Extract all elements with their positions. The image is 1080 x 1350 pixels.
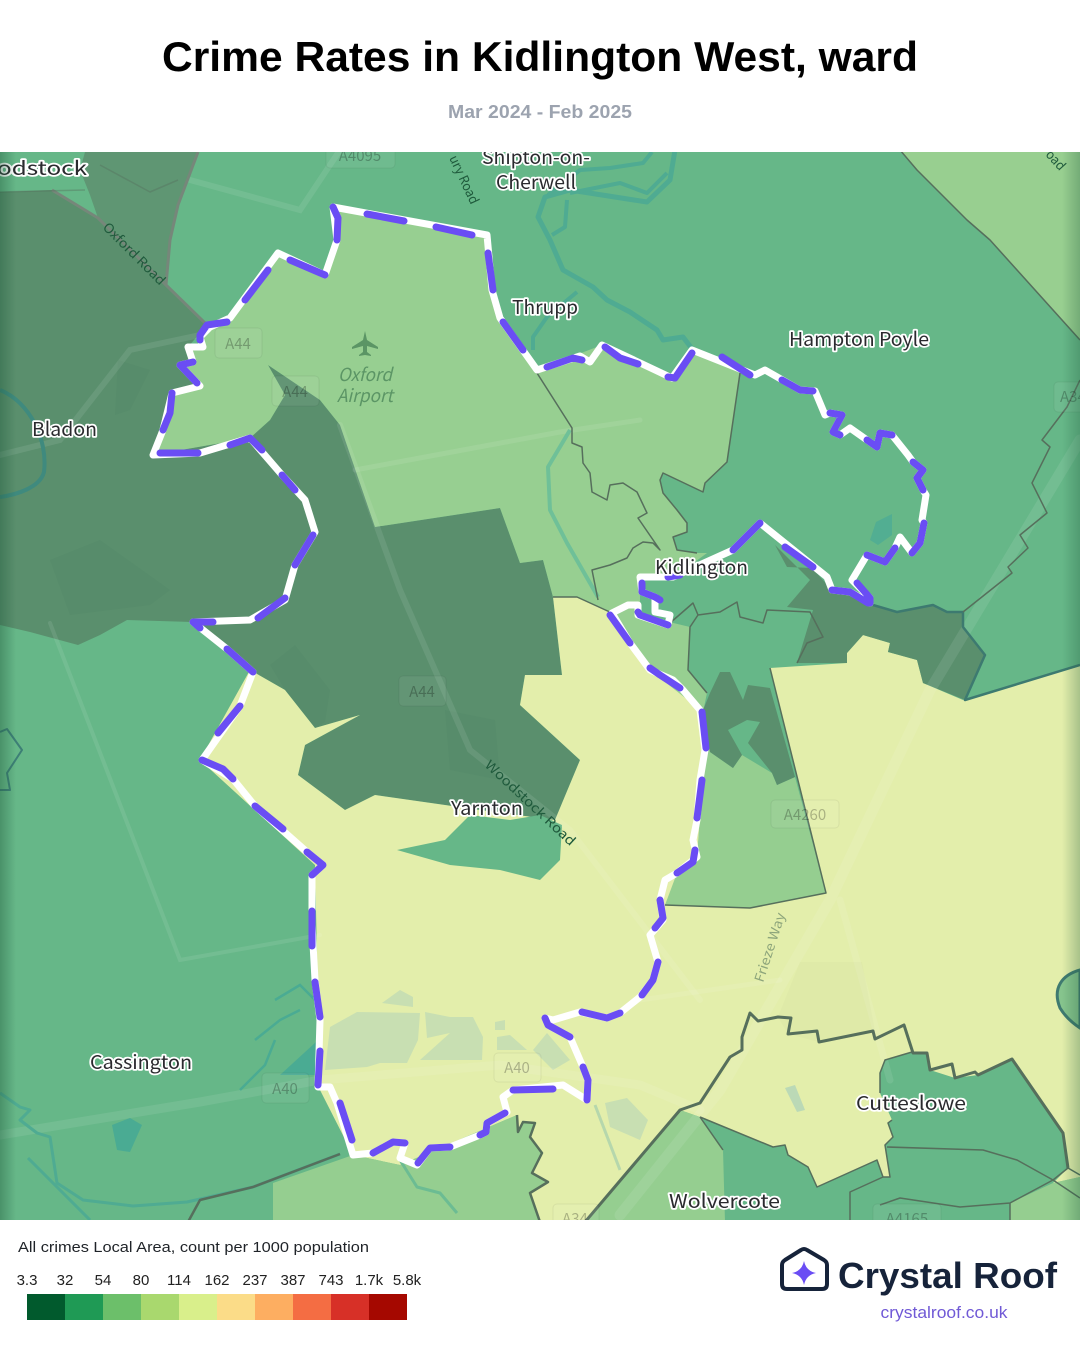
ward boundary purple dashes	[160, 207, 924, 1163]
road label: Oxford Road: Oxford Road	[99, 217, 171, 289]
road shield: A34	[552, 1204, 600, 1220]
area: Oxford Airport light green	[152, 207, 740, 712]
icon: house outline	[782, 1249, 827, 1289]
label: Oxford Airport	[337, 366, 395, 406]
boundary lines	[0, 150, 1080, 1222]
road shield: A40 centre: A40	[504, 1057, 530, 1078]
place label: Kidlington: Kidlington	[655, 553, 748, 580]
rivers	[0, 150, 693, 1220]
road shield: A44 centre	[399, 676, 446, 706]
label: Oxford Airport: Airport	[337, 382, 395, 408]
legend tick labels: 162	[204, 1272, 230, 1289]
legend tick labels	[17, 1272, 422, 1289]
legend tick labels: 32	[57, 1272, 73, 1289]
website url: crystalroof.co.uk	[880, 1304, 1008, 1322]
road shield: A44 north	[215, 328, 262, 358]
legend tick labels: 743	[318, 1272, 344, 1289]
road shield: A44 north: A44	[225, 333, 251, 354]
area: Yarnton centre green	[397, 815, 562, 880]
road shield: A40 centre	[494, 1053, 541, 1082]
place label: Cassington: Cassington	[90, 1048, 192, 1075]
area: south Kidlington dark finger	[703, 672, 795, 785]
road label: Frieze Way: Frieze Way	[749, 910, 789, 984]
ward wetland channels	[240, 985, 315, 1090]
road shield: A40 west: A40	[272, 1078, 298, 1099]
road shield: A4165: A4165	[886, 1208, 928, 1229]
icon: airport plane	[352, 331, 378, 356]
place label: Shipton-on-Cherwell	[482, 143, 590, 195]
legend title: All crimes Local Area, count per 1000 population	[18, 1239, 369, 1256]
area: south Kidlington light green	[665, 748, 825, 908]
area: east Kidlington dark zone	[767, 537, 985, 700]
legend tick labels: 80	[133, 1272, 149, 1289]
legend colour scale	[27, 1294, 407, 1320]
area: north-west Oxford patch of industrial yellow	[778, 962, 875, 1042]
area: west dark zone	[0, 190, 580, 820]
area: south-east light green	[1010, 1177, 1080, 1222]
road shield: A4165	[872, 1204, 942, 1220]
road shield: A44 airport	[272, 376, 319, 406]
place label: Hampton Poyle: Hampton Poyle	[789, 325, 929, 352]
place label: Thrupp: Thrupp	[512, 293, 578, 320]
road shield: A40 west	[262, 1073, 309, 1103]
area: north-east lighter zone	[900, 150, 1080, 340]
place label: Shipton-on-Cherwell: Shipton-on-	[482, 143, 590, 170]
label: Oxford Airport: Oxford	[338, 361, 395, 387]
road shield: A4095	[326, 152, 396, 168]
area: Woodstock town dark zone	[80, 152, 198, 285]
legend tick labels: 54	[95, 1272, 111, 1289]
legend tick labels: 3.3	[17, 1272, 37, 1289]
legend tick labels: 1.7k	[355, 1272, 384, 1289]
ponds and water network	[112, 514, 892, 1152]
place label: Shipton-on-Cherwell: Cherwell	[496, 168, 576, 195]
ward boundary white line	[153, 207, 926, 1165]
darker patches	[285, 690, 315, 728]
road shield: A4260	[771, 800, 839, 828]
road label: north-east road fragment: oad	[1042, 145, 1071, 174]
road label: Woodstock Road: Woodstock Road	[481, 755, 581, 849]
road shield: A44 centre: A44	[409, 681, 435, 702]
place label: Yarnton: Yarnton	[450, 794, 523, 821]
area: Yarnton yellow	[200, 597, 1080, 1222]
area: south light green	[273, 1115, 548, 1222]
logo wordmark: Crystal Roof	[838, 1255, 1058, 1296]
place label: Bladon: Bladon	[32, 415, 97, 442]
icon: purple star	[792, 1261, 816, 1285]
title: Crime Rates in Kidlington West, ward	[162, 33, 918, 80]
road shield: A4095: A4095	[339, 145, 381, 166]
road shield: A44 airport: A44	[282, 381, 308, 402]
area: Peartree island east	[1057, 970, 1080, 1028]
legend	[17, 1239, 422, 1320]
place label: Wolvercote: Wolvercote	[669, 1187, 780, 1214]
area: Wolvercote light green	[585, 1110, 725, 1222]
logo: Crystal Roof	[782, 1249, 1058, 1322]
road shield: A34: A34	[562, 1208, 588, 1229]
road label: Banbury Road fragment: ury Road	[445, 152, 485, 207]
legend tick labels: 5.8k	[393, 1272, 422, 1289]
place label: Cutteslowe: Cutteslowe	[856, 1089, 966, 1116]
date range subtitle: Mar 2024 - Feb 2025	[448, 102, 632, 122]
legend tick labels: 387	[280, 1272, 306, 1289]
legend tick labels: 114	[167, 1272, 191, 1289]
road shield: A4260: A4260	[784, 804, 826, 825]
road shield: A34 east	[1054, 382, 1080, 412]
roads	[0, 150, 1080, 1215]
gravel pits	[325, 990, 805, 1140]
map base	[0, 152, 1080, 1220]
legend tick labels: 237	[242, 1272, 268, 1289]
